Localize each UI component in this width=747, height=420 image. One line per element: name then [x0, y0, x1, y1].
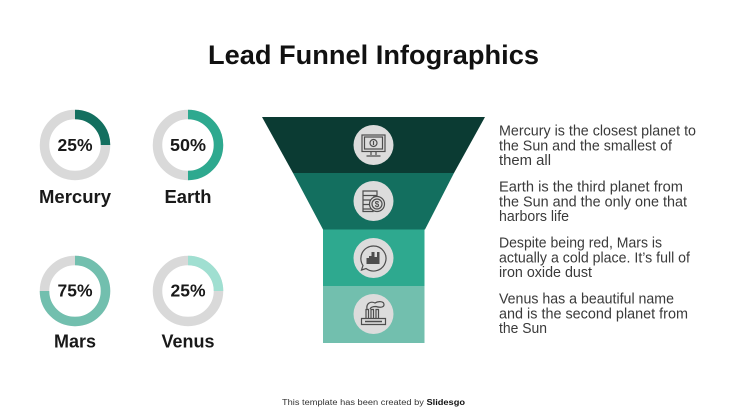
text: Mercury description: the Sun and the smallest of — [499, 138, 673, 154]
icon: coins with dollar — [354, 181, 394, 221]
text: Earth description: the Sun and the only one that — [499, 194, 687, 210]
text: Mercury description: them all — [499, 153, 551, 169]
text: Earth description: Earth is the third planet from — [499, 180, 683, 196]
donut: Venus 25%: 25% — [170, 280, 206, 300]
title: Lead Funnel Infographics — [208, 40, 539, 70]
text: Mars description: iron oxide dust — [499, 265, 592, 281]
donut: Mars 75% — [44, 260, 106, 322]
text: Mars description: Despite being red, Mars is — [499, 236, 662, 252]
text: Earth description — [499, 180, 687, 225]
text: Venus description — [499, 292, 688, 337]
icon: coins with dollar: $ — [375, 200, 380, 209]
donut: Mercury 25% — [44, 114, 106, 176]
text: Mars description — [499, 236, 691, 281]
text: Mars description: actually a cold place. It’s full of — [499, 250, 691, 266]
text: Venus description: the Sun — [499, 321, 547, 337]
footer credit: This template has been created by Slidesgo — [282, 398, 465, 407]
funnel section 4 — [323, 286, 424, 343]
donut: Earth 50%: 50% — [170, 135, 206, 155]
icon: chat bubble with bar chart — [354, 238, 394, 278]
label: Venus: Venus — [162, 332, 214, 352]
donut: Earth 50% — [158, 114, 218, 176]
icon: monitor with dollar — [354, 125, 394, 165]
funnel section 2 — [293, 173, 454, 230]
text: Earth description: harbors life — [499, 209, 569, 225]
donut: Venus 25% — [158, 260, 218, 322]
funnel section 3 — [323, 230, 424, 286]
donut: Mars 75%: 75% — [58, 280, 93, 300]
funnel — [262, 117, 485, 343]
label: Mars: Mars — [54, 332, 96, 352]
text: Mercury description — [499, 124, 696, 169]
label: Mercury: Mercury — [39, 187, 111, 207]
text: Venus description: Venus has a beautiful name — [499, 292, 674, 308]
label: Earth: Earth — [164, 187, 212, 207]
funnel section 1 — [262, 117, 485, 173]
text: Mercury description: Mercury is the closest planet to — [499, 124, 696, 140]
icon: factory with smoke — [354, 294, 394, 334]
donut: Mercury 25%: 25% — [58, 135, 93, 155]
text: Venus description: and is the second planet from — [499, 306, 688, 322]
